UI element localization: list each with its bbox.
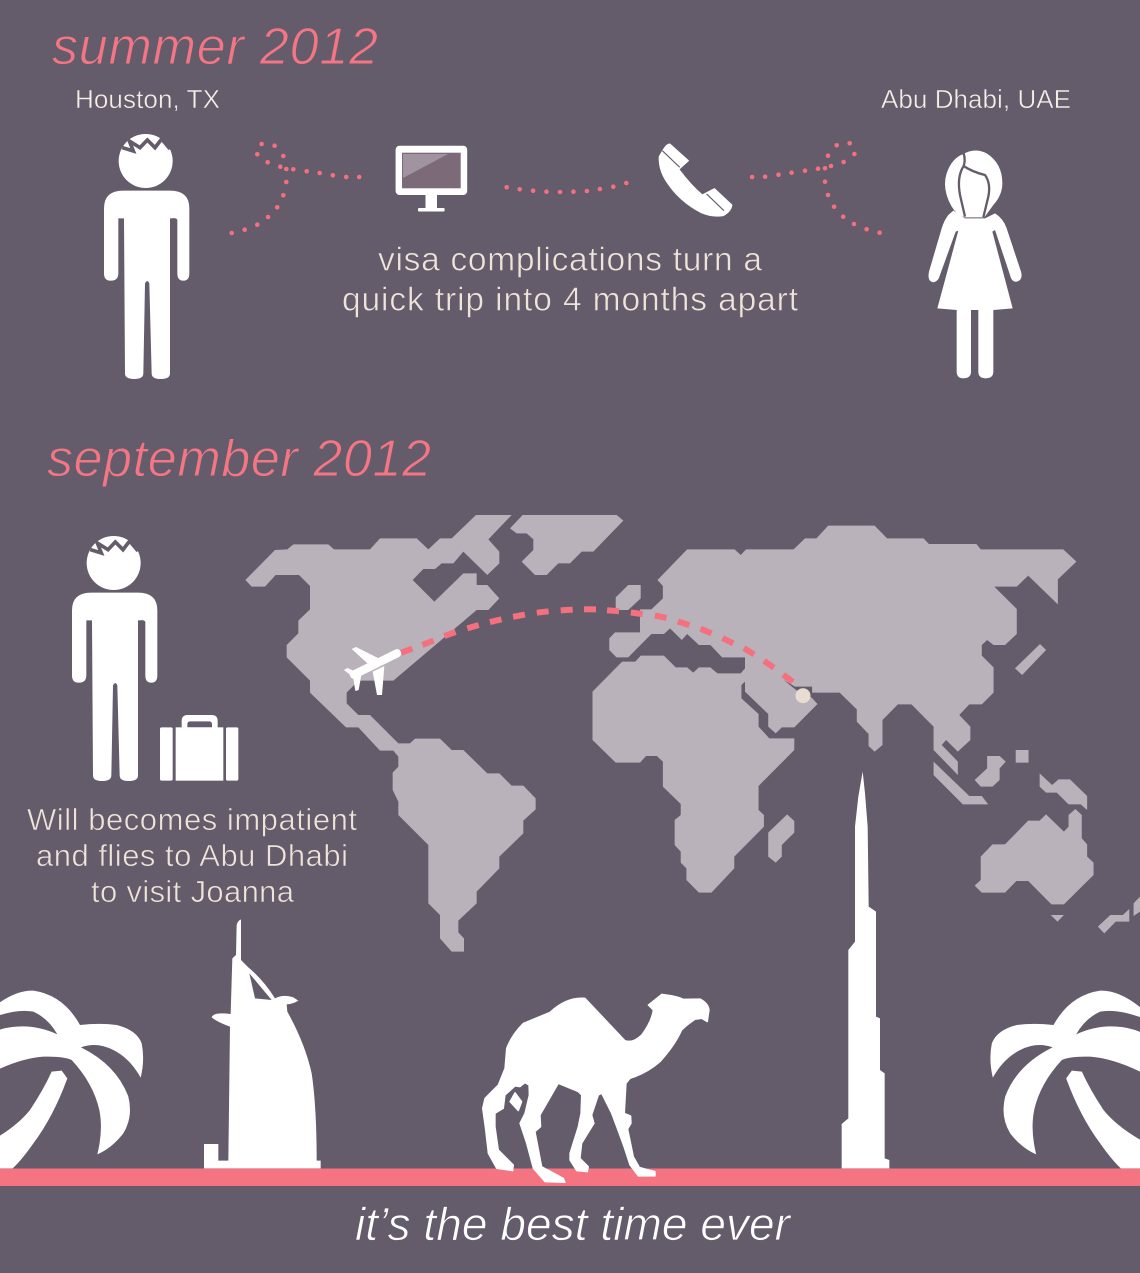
dashed flight path — [401, 609, 793, 682]
icon: telephone handset — [659, 144, 732, 216]
destination dot: Abu Dhabi — [796, 688, 810, 703]
man figure: Will in Houston — [104, 134, 189, 379]
label: Houston, TX: Houston, TX — [75, 84, 220, 114]
dotted line: Houston to computer — [229, 142, 362, 235]
eurasia, africa, australia, islands — [592, 526, 1140, 933]
landmark: Burj Khalifa — [842, 772, 889, 1168]
title: september 2012: september 2012 — [47, 430, 431, 488]
world map — [245, 515, 1140, 952]
text: visa complications: visa complications turn a — [378, 242, 762, 278]
closing caption: it’s the best time ever — [355, 1198, 792, 1250]
text: Will becomes impatient: Will becomes impatient — [27, 802, 357, 837]
right palm tree — [990, 991, 1140, 1168]
text: Will becomes impatient: and flies to Abu Dhabi — [36, 838, 348, 873]
text: Will becomes impatient: to visit Joanna — [91, 874, 295, 909]
dotted line: computer to phone — [504, 181, 629, 194]
north and south america, greenland — [245, 515, 623, 952]
text: visa complications: quick trip into 4 months apart — [342, 282, 799, 318]
text: visa complications — [342, 242, 799, 318]
icon: airplane — [344, 647, 397, 695]
label: Abu Dhabi, UAE: Abu Dhabi, UAE — [881, 84, 1071, 114]
landmark: Burj Al Arab — [204, 919, 321, 1168]
ground bar — [0, 1168, 1140, 1186]
icon: computer monitor — [396, 146, 467, 212]
left palm tree — [0, 991, 143, 1168]
man figure: Will with luggage — [72, 536, 157, 781]
title: summer 2012: summer 2012 — [52, 18, 378, 76]
icon: suitcase — [160, 715, 238, 781]
dotted line: phone to Abu Dhabi — [750, 141, 882, 235]
landmark: camel — [483, 994, 709, 1182]
text: Will becomes impatient — [27, 802, 357, 909]
woman figure: Joanna in Abu Dhabi — [929, 150, 1022, 378]
